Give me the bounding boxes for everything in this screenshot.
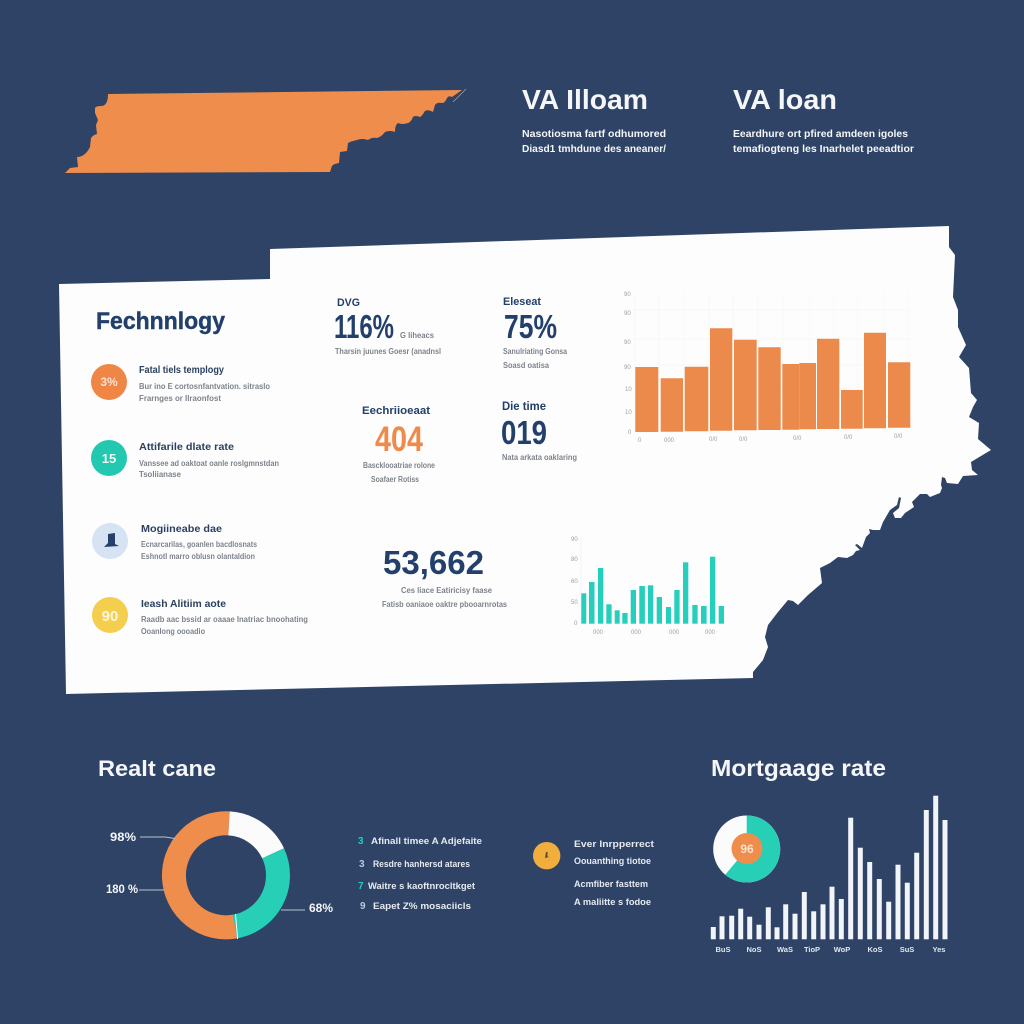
white state map panel [59,226,991,694]
small pie chart: 96 [740,842,754,856]
callout: yellow icon with text [533,839,655,908]
list item: teal [91,440,279,479]
list item: yellow: 90 [102,608,118,625]
stat: 75%: Sanulriating Gonsa [503,347,567,356]
big stat: 53,662: Ces liace Eatiricisy faase [401,586,493,595]
donut chart: 98% [110,832,136,844]
header block: VA loan: temafiogteng les Inarhelet peeadtior [733,143,914,155]
orange bar chart: 0 [628,430,632,436]
stat: 404: Soafaer Rotiss [371,475,419,484]
list item: orange [91,364,270,403]
orange state map [65,89,466,173]
orange bar chart: 0/0 [709,437,718,443]
white bar chart: WoP [834,945,850,954]
header block: VA loan: Eeardhure ort pfired amdeen igoles [733,128,908,140]
stat: 116%: 116% [334,308,394,345]
legend list: 7 [358,881,364,892]
stat: 019: 019 [501,414,547,451]
stat: 019: Die time [502,401,546,413]
legend list: Eapet Z% mosaciicls [373,901,471,912]
header block: VA Illoam: VA Illoam [522,84,648,115]
callout: yellow icon with text: A maliitte s fodoe [574,897,651,908]
list item: blue icon: Ecnarcarilas, goanlen bacdlosnats [141,540,257,549]
orange bar chart: 90 [624,340,631,346]
teal bar chart: 80 [571,557,578,563]
stat: 404: Eechriioeaat [362,405,430,417]
orange bar chart: 90 [624,311,631,317]
list item: orange: Frarnges or Ilraonfost [139,394,221,403]
callout: yellow icon with text: Acmfiber fasttem [574,879,648,890]
teal bar chart: 60 [571,579,578,585]
orange bar chart: 90 [624,365,631,371]
orange bar chart: 0 [638,438,642,444]
orange bar chart [624,292,910,444]
orange bar chart: 0/0 [739,437,748,443]
donut chart: 180 % [106,884,138,896]
list item: yellow: Ieash Alitiim aote [141,599,226,610]
teal bar chart [571,537,724,636]
stat: 75%: Eleseat [503,296,541,308]
orange bar chart: 10 [625,410,632,416]
orange bar chart: 000 [664,438,675,444]
legend list: Waitre s kaoftnrocltkget [368,881,476,892]
white bar chart: NoS [746,945,762,954]
header block: VA loan [733,84,914,155]
list item: teal: 15 [102,451,116,466]
teal bar chart: 000 [631,630,642,636]
list item: orange: Bur ino E cortosnfantvation. sitraslo [139,382,270,391]
orange bar chart: 10 [625,387,632,393]
list item: blue icon [92,523,257,561]
orange bar chart: 90 [624,292,631,298]
legend list: Afinall timee A Adjefaite [371,836,482,847]
list item: orange: 3% [100,375,118,389]
header block: VA Illoam: Nasotiosma fartf odhumored [522,128,666,140]
list item: orange: Fatal tiels templogy [139,365,224,376]
big stat: 53,662: 53,662 [383,544,484,581]
stat: 75%: 75% [504,308,557,345]
legend list: 3 [359,859,365,870]
white bar chart: SuS [900,945,914,954]
donut chart: 68% [309,903,333,915]
teal bar chart: 000 [593,630,604,636]
header block: VA Illoam [522,84,666,155]
bottom heading: donut section: Realt cane [98,756,216,781]
stat: 404: Bascklooatriae rolone [363,461,435,470]
stat: 116%: G liheacs [400,331,435,340]
stat: 019 [501,401,577,462]
orange bar chart: 0/0 [844,435,853,441]
orange bar chart: 0/0 [894,434,903,440]
white bar chart: Yes [933,945,945,954]
header block: VA loan: VA loan [733,84,837,115]
stat: 019: Nata arkata oaklaring [502,453,577,462]
small pie chart [713,816,780,882]
list item: teal: Tsoliianase [139,470,182,479]
white bar chart [711,796,948,954]
donut chart [106,823,333,939]
big stat: 53,662: Fatisb oaniaoe oaktre pbooarnrotas [382,600,508,609]
header block: VA Illoam: Diasd1 tmhdune des aneaner/ [522,143,666,155]
teal bar chart: 50 [571,600,578,606]
stat: 75%: Soasd oatisa [503,361,550,370]
list item: blue icon: Eshnotl marro oblusn olantaldion [141,552,255,561]
stat: 116% [334,297,441,356]
legend list: 3 [358,836,364,847]
stat: 404: 404 [375,420,423,459]
list item: yellow [92,597,308,636]
teal bar chart: 000 [705,630,716,636]
stat: 75% [503,296,567,370]
list item: teal: Vanssee ad oaktoat oanle roslgmnstdan [139,459,279,468]
bottom heading: mortgage rate: Mortgaage rate [711,755,886,781]
big stat: 53,662 [382,544,508,609]
stat: 116%: DVG [337,297,360,309]
teal bar chart: 90 [571,537,578,543]
stat: 116%: Tharsin juunes Goesr (anadnsl [335,347,441,356]
callout: yellow icon with text: Oouanthing tiotoe [574,856,651,867]
stat: 404 [362,405,435,484]
orange bar chart: 0/0 [793,436,802,442]
list item: yellow: Raadb aac bssid ar oaaae Inatriac bnoohating [141,615,308,624]
callout: yellow icon with text: Ever Inrpperrect [574,839,655,850]
teal bar chart: 000 [669,630,680,636]
list item: teal: Attifarile dlate rate [139,442,234,453]
legend list: Resdre hanhersd atares [373,859,470,870]
white bar chart: BuS [716,945,730,954]
white bar chart: KoS [868,945,882,954]
list item: yellow: Ooanlong oooadio [141,627,205,636]
teal bar chart: 0 [574,621,578,627]
white bar chart: WaS [777,945,793,954]
panel heading: technology: Fechnnlogy [96,308,226,335]
list item: blue icon: Mogiineabe dae [141,524,222,535]
white bar chart: TioP [804,945,820,954]
legend list [358,836,482,912]
legend list: 9 [360,901,366,912]
